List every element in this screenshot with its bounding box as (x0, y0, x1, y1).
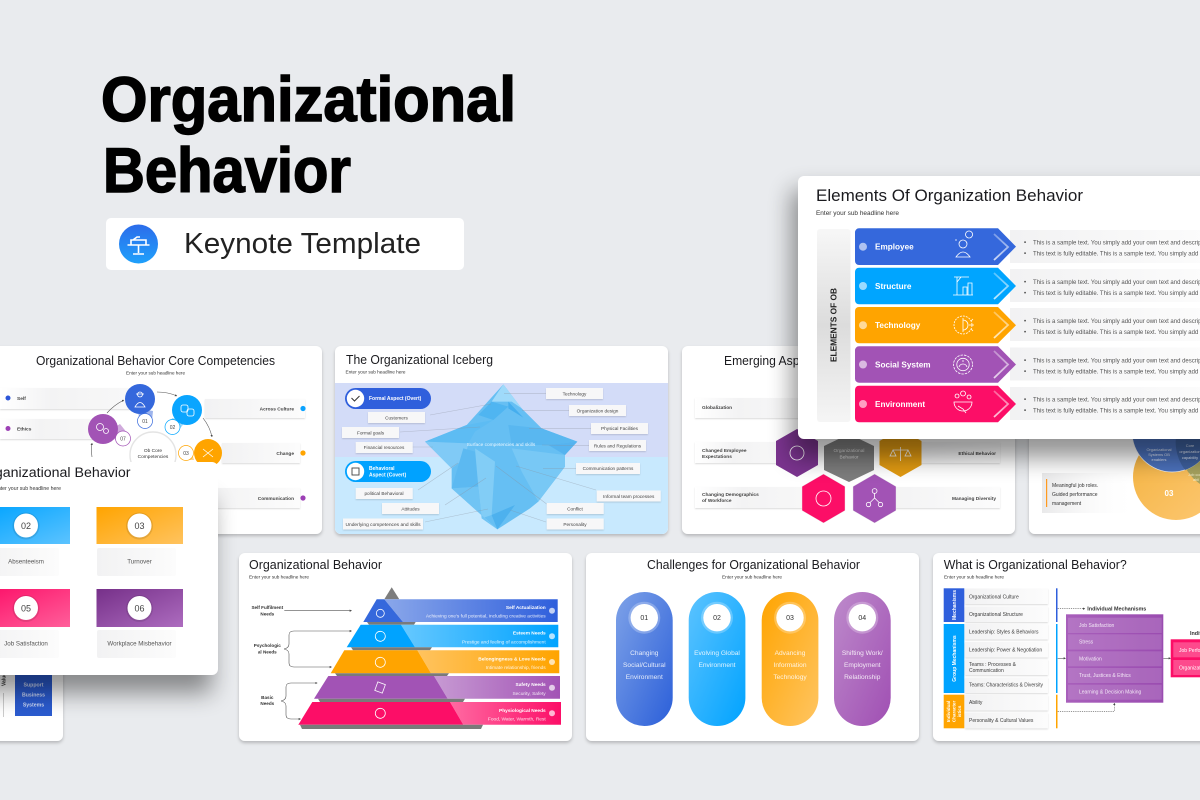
emerging rows: Managing Diversity (952, 496, 996, 502)
iceberg labels: Personality (563, 522, 587, 527)
text box: meaningful job roles: Guided performance (1052, 492, 1098, 498)
mechanism category bars: istics (957, 705, 962, 717)
row: technology: • (1024, 319, 1026, 325)
mechanism category bars: Mechanisms (952, 590, 958, 620)
row: environment: • (1024, 398, 1026, 404)
circular competency diagram (88, 384, 222, 478)
leader lines (400, 394, 596, 522)
keynote template badge (106, 218, 464, 270)
purple panel: individual mechanisms (1066, 614, 1163, 703)
panel: organizational iceberg: Enter your sub headline here (346, 370, 406, 376)
purple panel: individual mechanisms: Trust, Justices & Ethics (1079, 673, 1131, 679)
row: structure (855, 268, 1200, 304)
panel: elements of organization behavior: Enter your sub headline here (816, 210, 899, 217)
challenge pill 04: Relationship (844, 674, 881, 681)
pyramid need labels and arrows: Psychologic (254, 643, 281, 648)
mechanism rows (965, 588, 1048, 728)
challenge pill 03: Information (774, 662, 807, 669)
mechanism rows: Leadership: Power & Negotiation (969, 647, 1042, 653)
circular competency diagram: Competencies (138, 454, 169, 460)
card 06 workplace misbehavior: Workplace Misbehavior (107, 640, 172, 648)
mechanism rows: Leadership: Styles & Behaviors (969, 630, 1039, 636)
panel: challenges: Enter your sub headline here (722, 574, 782, 580)
mechanism category bars: Individual (946, 701, 951, 722)
iceberg labels: Technology (563, 392, 587, 396)
panel: what is organizational behavior (933, 553, 1200, 741)
iceberg labels: Rules and Regulations (594, 444, 642, 448)
venn diagram: abil (1193, 477, 1199, 482)
row: environment: Environment (875, 400, 925, 409)
iceberg labels: Underlying competences and skills (346, 522, 421, 527)
challenge pill 01: Environment (626, 674, 663, 681)
iceberg labels: Formal goals (357, 430, 385, 436)
row: technology: • (1024, 330, 1026, 336)
heading: challenges: Challenges for Organizational Behavior (647, 557, 861, 572)
venn diagram (1132, 392, 1200, 520)
pill: behavioral aspect (345, 461, 431, 482)
row: social system: • (1024, 369, 1026, 375)
card 05 job satisfaction: 05 (21, 603, 31, 613)
challenge pill 02: Environment (698, 662, 736, 669)
card 05 job satisfaction (0, 589, 70, 658)
row: environment: • (1024, 408, 1026, 414)
venn diagram: capability (1182, 455, 1198, 460)
heading: elements: Elements Of Organization Behavior (816, 187, 1084, 205)
card 06 workplace misbehavior: 06 (134, 603, 145, 613)
panel: bottom-left partial slide: Systems (23, 702, 44, 708)
left competency rows: Self (17, 396, 26, 402)
challenge pill 01: Changing (630, 650, 659, 657)
text box: meaningful job roles: Meaningful job roles. (1052, 483, 1098, 489)
panel: venn diagram slide (1029, 346, 1200, 534)
iceberg labels (342, 388, 661, 530)
right competency rows: Communication (258, 496, 294, 502)
row: technology: Technology (875, 321, 921, 330)
row: employee: • (1024, 240, 1026, 246)
iceberg labels: political Behavioral (364, 491, 404, 496)
venn diagram: organization (1179, 449, 1200, 454)
row: employee (855, 228, 1200, 265)
venn diagram: Core (1186, 443, 1194, 448)
heading: what is OB: What is Organizational Behavior? (944, 557, 1127, 572)
challenge pill 02 (689, 592, 745, 726)
card 02 absenteeism: Absenteeism (8, 558, 44, 566)
venn diagram: Systems OB (1148, 452, 1170, 457)
iceberg illustration (425, 384, 577, 529)
purple panel: individual mechanisms: Motivation (1079, 656, 1102, 662)
panel: what is organizational behavior: Individual Mechanisms (1087, 606, 1146, 612)
title (101, 65, 516, 206)
emerging rows (695, 398, 1000, 508)
heading: iceberg: The Organizational Iceberg (346, 352, 493, 367)
challenge pill 01: Social/Cultural (623, 662, 666, 669)
panel: bottom-left partial slide (0, 640, 63, 741)
heading: pyramid: Organizational Behavior (249, 557, 383, 572)
pyramid icons (375, 609, 385, 718)
side label: elements of OB (817, 229, 850, 422)
pyramid tier text: Food, Water, Warmth, Rest (488, 716, 546, 722)
emerging rows: Changing Demographics (702, 492, 759, 498)
iceberg labels: Physical Facilities (601, 426, 639, 431)
pyramid tier text: Achieving one's full potential, including creative activities (426, 614, 546, 620)
mechanism rows: Teams: Characteristics & Diversity (969, 682, 1043, 688)
mechanism rows: Ability (969, 700, 983, 706)
iceberg labels: Financial resources (364, 445, 405, 450)
challenge pill 02: 02 (713, 615, 721, 622)
panel: pyramid (239, 553, 572, 741)
row: structure: • (1024, 280, 1026, 286)
panel: bottom-left partial slide: Value (2, 673, 8, 686)
mechanism category bars: Character (952, 701, 956, 722)
purple panel: individual mechanisms: Stress (1079, 640, 1094, 646)
row: employee: • (1024, 252, 1026, 258)
hexagon cluster (776, 429, 922, 523)
keynote template badge: Keynote Template (184, 228, 421, 260)
pyramid need labels and arrows: al Needs (258, 650, 277, 654)
card 03 turnover (96, 507, 183, 576)
row: social system: Social System (875, 360, 931, 370)
iceberg labels: Conflict (567, 506, 584, 512)
venn diagram: 03 (1165, 489, 1174, 498)
challenge pill 01: 01 (640, 615, 648, 622)
pyramid tier text (426, 605, 546, 722)
pyramid need labels and arrows: Self Fulfilment (251, 605, 284, 610)
pink panel: individual outcomes (1171, 639, 1200, 677)
iceberg labels: Attitudes (401, 506, 420, 512)
circular competency diagram: Ob Core (144, 448, 162, 454)
hexagon cluster: Behavior (840, 454, 859, 460)
challenge pill 02: Evolving Global (694, 650, 740, 657)
pyramid chart (298, 587, 561, 729)
row: technology (855, 307, 1200, 343)
pill: behavioral aspect: Behavioral (369, 466, 395, 472)
mechanism rows: Teams : Processes & (969, 662, 1017, 668)
row: social system: • (1024, 358, 1026, 364)
panel: organizational iceberg (335, 346, 668, 534)
side label: elements of OB: ELEMENTS OF OB (828, 288, 838, 362)
emerging rows: of Workforce (702, 498, 732, 504)
mechanism rows: Personality & Cultural Values (969, 718, 1034, 724)
emerging rows: Changed Employee (702, 448, 747, 454)
pyramid need labels and arrows: Needs (260, 701, 275, 706)
panel: emerging aspects (682, 346, 1015, 534)
connector arrows (1058, 609, 1171, 711)
panel: pyramid: Enter your sub headline here (249, 574, 309, 580)
iceberg labels: Customers (385, 416, 408, 420)
circular competency diagram: 01 (142, 419, 148, 425)
panel: bottom-left partial slide: Support (24, 682, 44, 688)
pill: formal aspect: Formal Aspect (Overt) (369, 396, 422, 402)
challenge pill 03 (762, 592, 818, 726)
pyramid tier text: Safety Needs (516, 682, 546, 688)
right competency rows (205, 399, 306, 508)
emerging rows: Expectations (702, 454, 732, 460)
row: employee: Employee (875, 243, 914, 252)
panel: challenges (586, 553, 919, 741)
challenge pill 03: Technology (773, 674, 807, 681)
emerging rows: Globalization (702, 405, 732, 411)
row: social system (855, 346, 1200, 383)
card 03 turnover: Turnover (127, 558, 152, 566)
venn diagram: enablers (1152, 457, 1167, 462)
panel: front left slide (0, 462, 218, 675)
pyramid tier text: Belongingness & Love Needs (478, 656, 546, 662)
challenge pill 03: Advancing (775, 650, 806, 657)
challenge pill 03: 03 (786, 615, 794, 622)
panel: elements of organization behavior (798, 176, 1200, 439)
circular competency diagram: 07 (120, 436, 126, 442)
mechanism rows: Organizational Culture (969, 594, 1019, 600)
card 02 absenteeism: 02 (21, 521, 31, 531)
card 03 turnover: 03 (134, 521, 145, 531)
pyramid tier text: Prestige and feeling of accomplishment (462, 640, 546, 646)
emerging rows: Ethical Behavior (958, 451, 996, 457)
panel: core competencies: Enter your sub headline here (126, 370, 185, 376)
mechanism category bars: Group Mechanisms (952, 635, 958, 682)
pill: formal aspect (345, 388, 431, 409)
vertical connector bars (1056, 588, 1058, 728)
iceberg caption: Surface competencies and skills (467, 442, 536, 448)
pyramid need labels and arrows (251, 605, 352, 719)
pill: behavioral aspect: Aspect (Covert) (369, 472, 407, 478)
iceberg labels: Communication patterns (583, 466, 634, 471)
title: Behavior (103, 136, 351, 206)
pyramid tier text: Security, Safety (512, 691, 546, 697)
row: environment (855, 386, 1200, 422)
pyramid tier dots (549, 608, 555, 716)
heading: emerging aspects: Emerging Aspects of OB (724, 353, 856, 368)
row: structure: Structure (875, 282, 912, 291)
row: structure: • (1024, 291, 1026, 297)
panel: core competencies (0, 346, 322, 534)
mechanism category bars (944, 588, 964, 728)
venn diagram: Organizational (1146, 447, 1172, 452)
text box: meaningful job roles (1042, 473, 1138, 513)
right competency rows: Change (276, 451, 294, 457)
right competency rows: Across Culture (260, 406, 294, 412)
card 02 absenteeism (0, 507, 70, 576)
pyramid need labels and arrows: Needs (260, 612, 275, 616)
heading: core competencies: Organizational Behavior Core Competencies (36, 353, 275, 368)
hexagon cluster: Organizational (834, 448, 864, 454)
text box: meaningful job roles: management (1052, 501, 1082, 507)
title: Organizational (101, 65, 516, 135)
iceberg labels: Organization design (577, 408, 619, 414)
iceberg labels: Informal team processes (603, 494, 655, 499)
pyramid tier text: Physiological Needs (499, 708, 546, 714)
pyramid need labels and arrows: Basic (261, 695, 274, 700)
pyramid tier text: Intimate relationship, friends (486, 665, 546, 671)
challenge pill 04: Shifting Work/ (842, 650, 883, 657)
circular competency diagram: 03 (183, 451, 189, 457)
challenge pill 04: 04 (858, 615, 866, 622)
pyramid tier text: Self Actualization (506, 605, 546, 611)
circular competency diagram: 02 (170, 425, 175, 431)
left competency rows: Ethics (17, 426, 32, 432)
purple panel: individual mechanisms: Job Satisfaction (1079, 623, 1115, 629)
challenge pill 04 (834, 592, 891, 726)
panel: what is organizational behavior: Enter your sub headline here (944, 574, 1004, 580)
mechanism rows: Organizational Structure (969, 612, 1023, 618)
pyramid tier text: Esteem Needs (513, 630, 546, 636)
card 06 workplace misbehavior (96, 589, 183, 658)
challenge pill 04: Employment (844, 662, 881, 669)
mechanism rows: Communication (969, 668, 1004, 674)
purple panel: individual mechanisms: Learning & Decision Making (1079, 690, 1141, 696)
left competency rows (0, 388, 130, 439)
challenge pill 01 (616, 592, 673, 726)
panel: bottom-left partial slide: Business (22, 692, 45, 698)
card 05 job satisfaction: Job Satisfaction (4, 640, 48, 648)
